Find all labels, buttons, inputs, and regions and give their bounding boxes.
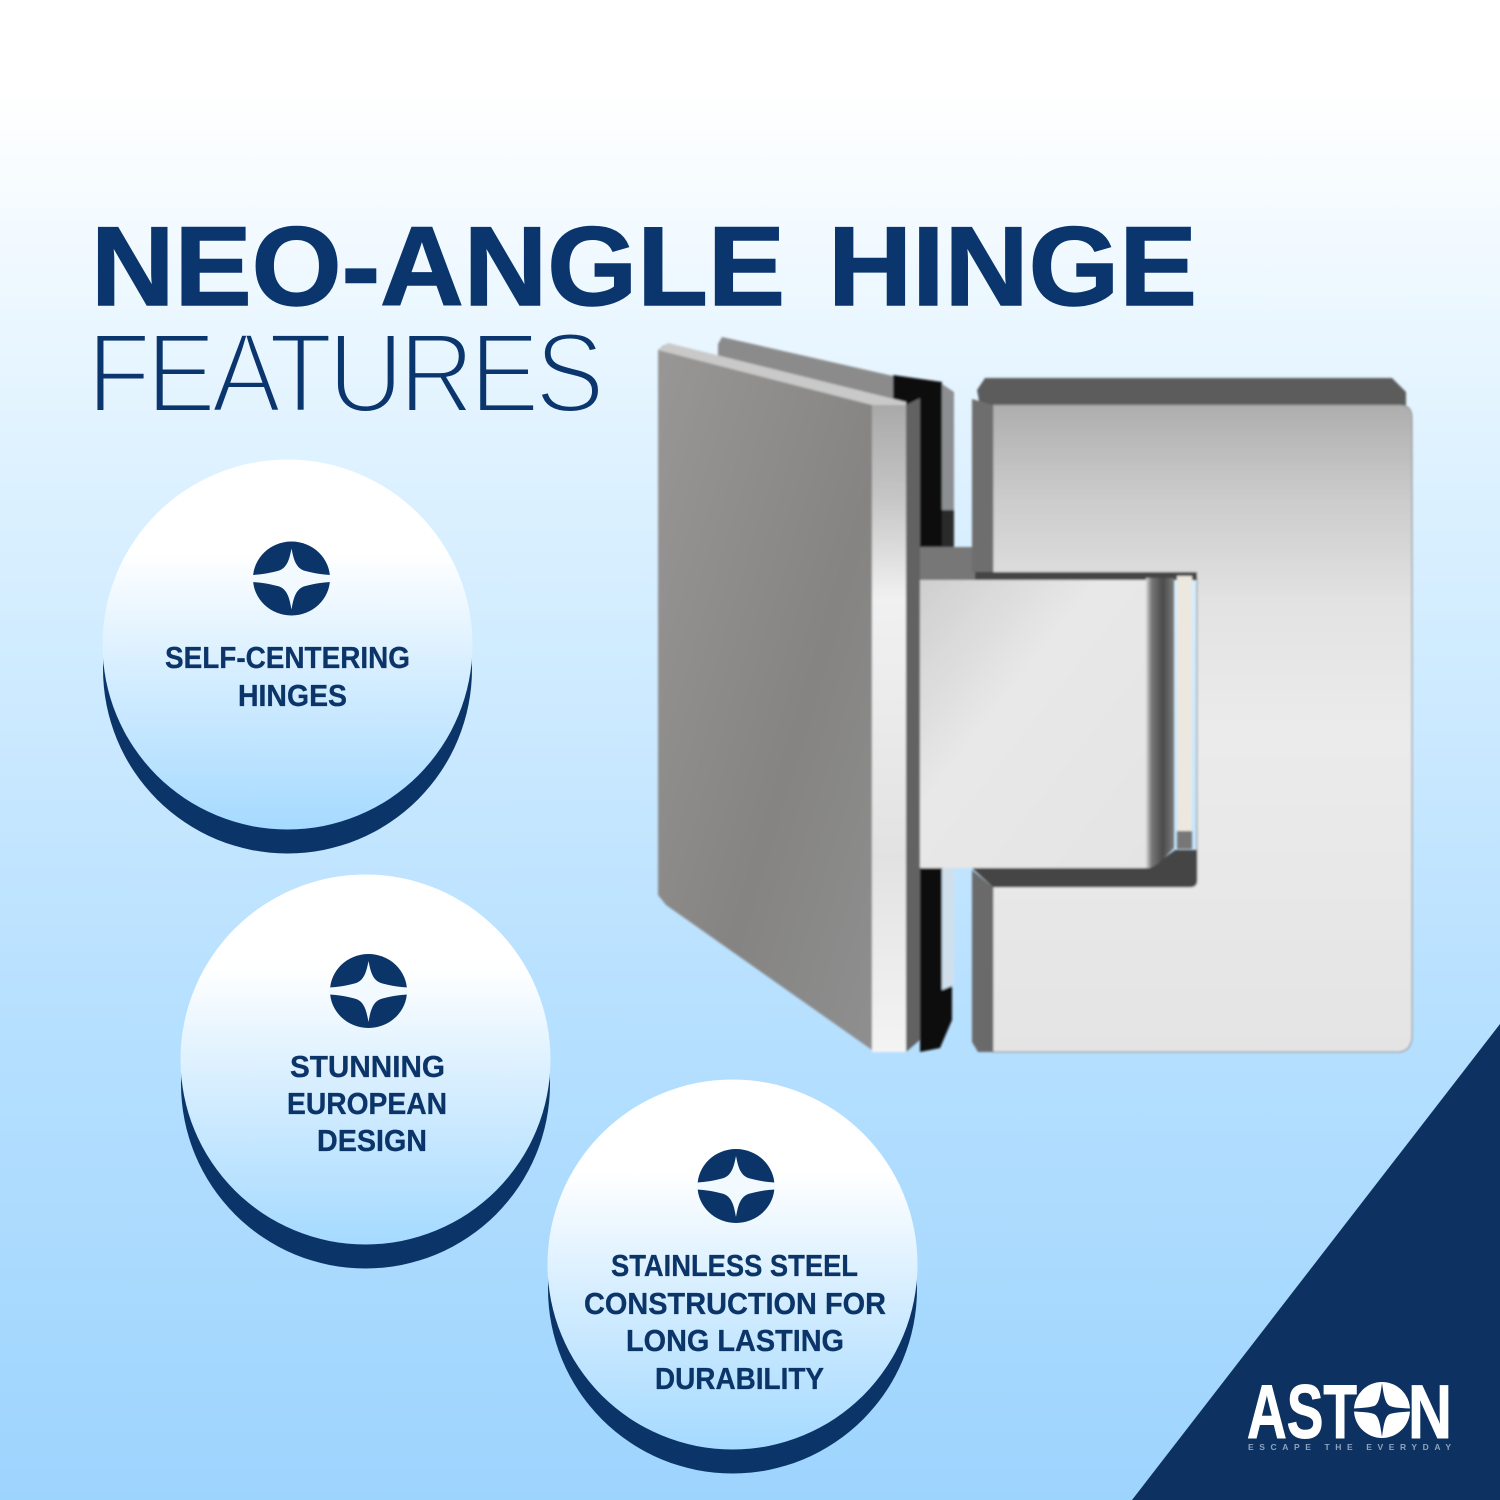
icon: star badge: [697, 1149, 775, 1223]
label: [165, 640, 410, 713]
label: STUNNING: [290, 1049, 445, 1084]
left plate top edge: [658, 343, 906, 406]
label: LONG LASTING: [626, 1323, 844, 1358]
label: EUROPEAN: [287, 1086, 447, 1121]
right plate side edge: [972, 399, 993, 572]
right plate lower side edge: [972, 870, 993, 1052]
label: [287, 1049, 447, 1158]
title: NEO-ANGLE: [91, 204, 785, 329]
right plate face: [993, 405, 1412, 1052]
label: HINGES: [238, 678, 347, 713]
icon: star badge: [252, 542, 330, 616]
hinge product image: [658, 337, 1412, 1052]
notch top line: [975, 572, 1197, 580]
title: [87, 204, 1197, 436]
label: SELF-CENTERING: [165, 640, 410, 675]
left plate chrome edge: [872, 405, 906, 1052]
logo: N: [1408, 1370, 1452, 1455]
label: DESIGN: [317, 1123, 427, 1158]
corner triangle: [1132, 1024, 1500, 1500]
rear clamp of left plate: [718, 337, 978, 1052]
feature: stainless steel construction: [548, 1080, 918, 1474]
logo star mark: [1354, 1382, 1410, 1438]
title: HINGE: [828, 204, 1197, 329]
feature: self-centering hinges: [102, 460, 472, 854]
label: [584, 1248, 886, 1396]
title: FEATURES: [87, 310, 601, 436]
slot shadow: [1177, 831, 1192, 849]
label: DURABILITY: [655, 1361, 824, 1396]
center block: [920, 580, 1146, 868]
left plate dark edge: [906, 398, 920, 1052]
logo: AST: [1247, 1370, 1357, 1455]
right plate top strip: [977, 378, 1406, 406]
feature: stunning european design: [180, 874, 550, 1268]
label: STAINLESS STEEL: [611, 1248, 858, 1283]
left plate face: [658, 345, 872, 1050]
center block curved edge: [1146, 578, 1174, 868]
hinge notch shadow: [972, 850, 1197, 887]
icon: star badge: [330, 954, 408, 1028]
label: CONSTRUCTION FOR: [584, 1286, 886, 1321]
slot highlight: [1177, 576, 1192, 831]
logo: ESCAPE THE EVERYDAY: [1248, 1442, 1451, 1452]
